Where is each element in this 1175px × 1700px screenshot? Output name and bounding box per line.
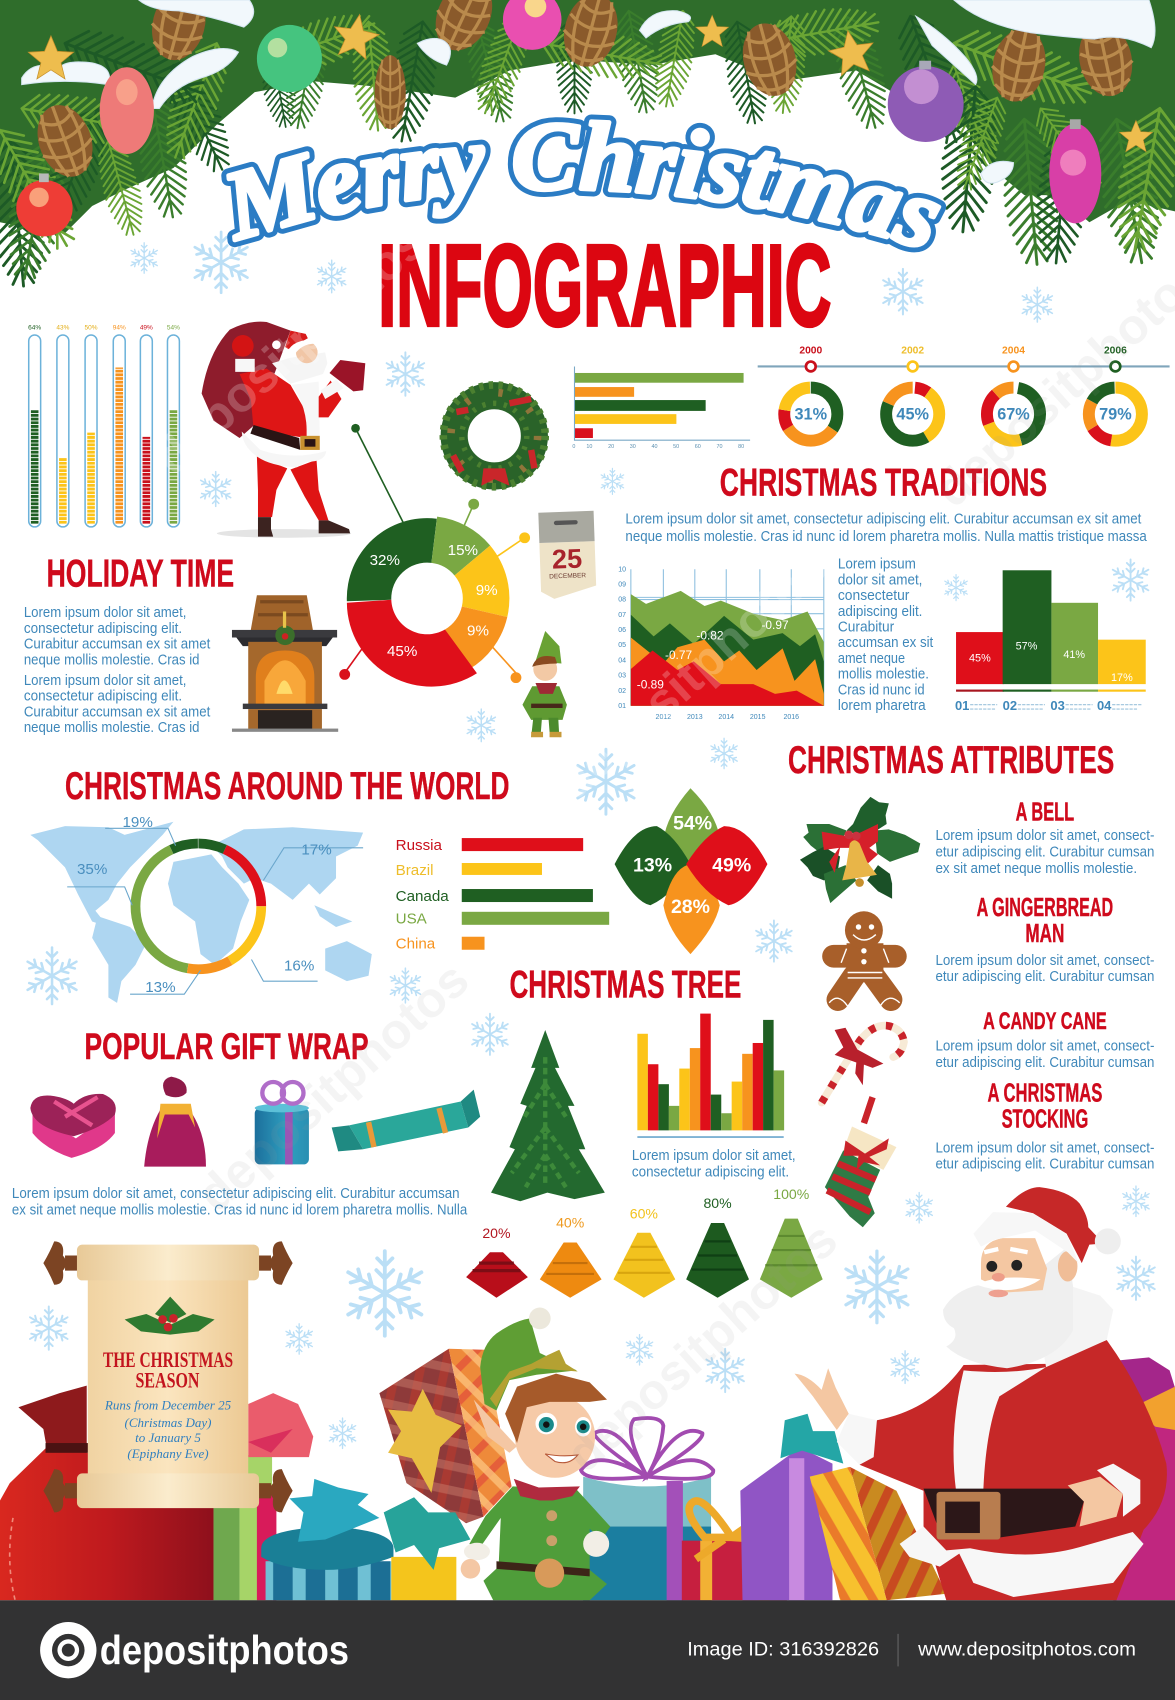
baubles	[16, 0, 1101, 236]
text: holiday time: Lorem ipsum dolor sit amet,	[24, 604, 186, 621]
green gift with pink bow	[214, 1393, 313, 1600]
snowflakes	[25, 232, 1157, 1448]
heading: Holiday Time: HOLIDAY TIME	[47, 553, 234, 596]
country bars: Canada	[396, 888, 449, 905]
text: stocking	[935, 1139, 1154, 1173]
horizontal bar chart: 60	[695, 444, 701, 450]
tube chart: 64%	[28, 325, 41, 332]
timeline 2002: 2002	[901, 345, 924, 356]
scroll heading: SEASON	[135, 1369, 200, 1393]
area chart: 10	[618, 566, 626, 573]
area chart: 2015	[750, 714, 766, 721]
cuff and hand left	[795, 1368, 877, 1465]
hat	[1006, 1187, 1121, 1263]
area chart: -0.89	[637, 677, 664, 691]
world map with ring chart: 35%	[77, 861, 107, 878]
timeline 2002: 45%	[896, 406, 929, 424]
watermarks: depositphotos	[143, 214, 436, 485]
bottom gifts scene	[0, 1349, 946, 1600]
horizontal bar chart	[572, 366, 750, 450]
holly	[125, 1297, 215, 1335]
illustration: gingerbread man	[829, 911, 900, 1006]
timeline 2002	[886, 345, 939, 441]
snow caps	[22, 0, 1155, 183]
tube chart	[28, 325, 180, 527]
world map with ring chart: 17%	[301, 841, 332, 858]
area chart: 07	[618, 612, 626, 619]
icon: candy wrap gift	[332, 1090, 480, 1151]
illustration: candy cane	[822, 1026, 904, 1103]
title: Merry Christmas: Merry Christmas	[221, 114, 946, 252]
timeline 2004: 67%	[997, 406, 1030, 424]
timeline 2000: 2000	[799, 345, 823, 356]
watermarks	[143, 214, 1175, 1483]
tube chart: 49%	[140, 325, 153, 332]
text: candy cane	[935, 1038, 1154, 1071]
area chart: 04	[618, 657, 626, 664]
timeline 2006	[1089, 345, 1142, 441]
icon: heart gift box	[30, 1094, 116, 1158]
heading: Christmas Tree: CHRISTMAS TREE	[509, 963, 741, 1006]
scroll text	[104, 1397, 232, 1461]
illustration: wreath	[443, 385, 545, 487]
illustration: calendar: DECEMBER	[549, 572, 586, 580]
striped gift	[810, 1467, 946, 1600]
column chart: 01-04	[955, 570, 1146, 713]
title: Merry Christmas: Merry Christmas	[226, 119, 942, 248]
donut chart: holiday time: 45%	[387, 643, 417, 660]
area chart: 2012	[656, 714, 671, 721]
area chart: 06	[618, 627, 626, 634]
horizontal bar chart: 20	[608, 444, 614, 450]
tube chart: 50%	[85, 325, 98, 332]
area chart: 08	[618, 597, 626, 604]
text: holiday time: neque mollis molestie. Cras id	[24, 719, 199, 736]
belt and buckle	[924, 1489, 1088, 1540]
donut chart: holiday time	[339, 424, 530, 687]
timeline donuts	[758, 345, 1170, 441]
watermarks: depositphotos	[555, 1211, 848, 1483]
petal chart: 49%	[712, 855, 751, 877]
illustration: Santa with sack	[202, 322, 365, 538]
illustration: small elf	[522, 631, 567, 737]
yellow gift with teal bow	[384, 1497, 470, 1600]
text: holiday time: consectetur adipiscing elit.	[24, 620, 182, 637]
column chart: 01-04: 57%	[1016, 640, 1038, 652]
collar fur	[1041, 1287, 1113, 1367]
area chart: 2014	[718, 714, 734, 721]
horizontal bar chart: 10	[586, 444, 592, 450]
text: area chart column: dolor sit amet,	[838, 571, 922, 588]
petal chart: 54%	[673, 812, 712, 834]
footer bar	[0, 1600, 1175, 1700]
text: bell: ex sit amet neque mollis molestie.	[935, 860, 1137, 877]
text: area chart column: Cras id nunc id	[838, 681, 925, 698]
fur front	[954, 1367, 1046, 1495]
scroll text: Runs from December 25	[104, 1397, 232, 1412]
tube chart: 43%	[56, 325, 70, 332]
world map with ring chart	[30, 814, 372, 1003]
horizontal bar chart: 80	[738, 444, 744, 450]
illustration: fireplace	[232, 595, 338, 732]
illustration: Christmas tree	[491, 1030, 605, 1201]
illustration: calendar: 25	[551, 543, 583, 575]
text: holiday time	[24, 604, 211, 736]
pyramid chart: 40%	[556, 1214, 585, 1230]
illustration: large elf	[461, 1308, 610, 1600]
tube chart: 94%	[113, 325, 126, 332]
timeline 2004	[987, 345, 1040, 441]
text: holiday time: Curabitur accumsan ex sit amet	[24, 704, 211, 721]
pyramid chart: 80%	[703, 1195, 732, 1211]
area chart: 2016	[783, 714, 799, 721]
text: holiday time: Lorem ipsum dolor sit amet,	[24, 672, 186, 689]
column chart: 01-04: 03	[1050, 698, 1065, 713]
country bars: Brazil	[396, 862, 434, 879]
petal chart: 28%	[671, 896, 710, 918]
right hand and cuff	[1068, 1464, 1140, 1527]
title: INFOGRAPHIC: INFOGRAPHIC	[378, 220, 831, 350]
heading: Popular Gift Wrap: POPULAR GIFT WRAP	[85, 1026, 369, 1067]
subheading: A Gingerbread Man	[977, 892, 1113, 948]
donut chart: holiday time: 32%	[370, 552, 400, 569]
petal chart	[615, 788, 767, 954]
beard	[943, 1247, 1073, 1368]
subheading: A Candy Cane: A CANDY CANE	[983, 1008, 1107, 1035]
icon: gift bag	[144, 1077, 206, 1167]
text: area chart column: lorem pharetra	[838, 697, 926, 714]
text: area chart column	[838, 556, 934, 714]
scroll text: (Christmas Day)	[125, 1415, 212, 1430]
pyramid chart: 20%	[482, 1225, 511, 1241]
image id: Image ID: 316392826	[687, 1639, 879, 1661]
subheading: A Christmas Stocking: A CHRISTMAS	[987, 1078, 1102, 1108]
brand name: depositphotos	[100, 1627, 349, 1673]
text: area chart column: accumsan ex sit	[838, 634, 934, 651]
coat	[860, 1340, 1167, 1600]
area chart: -0.77	[665, 648, 692, 662]
scroll heading: THE CHRISTMAS	[103, 1348, 233, 1372]
country bars: USA	[396, 911, 428, 928]
area chart: -0.97	[761, 618, 789, 632]
world map with ring chart: 13%	[145, 979, 176, 996]
icon: cylinder gift	[255, 1082, 309, 1164]
text: tree chart: Lorem ipsum dolor sit amet,	[632, 1147, 796, 1164]
leader lines and dots	[339, 424, 530, 683]
country bars	[396, 837, 609, 953]
watermarks: depositphotos	[187, 951, 479, 1222]
plaid gift	[379, 1349, 512, 1523]
text: area chart column: consectetur	[838, 587, 909, 604]
subheading: A Christmas Stocking: STOCKING	[1002, 1104, 1088, 1134]
timeline 2000: 31%	[795, 406, 828, 424]
watermarks: depositphotos	[544, 539, 837, 810]
text: holiday time: neque mollis molestie. Cras id	[24, 652, 199, 669]
area chart: 03	[618, 673, 626, 680]
column chart: 01-04: 04	[1097, 698, 1112, 713]
text: area chart column: Curabitur	[838, 619, 894, 636]
scroll text: (Epiphany Eve)	[127, 1446, 209, 1461]
scroll heading	[103, 1348, 233, 1393]
country bars: Russia	[396, 837, 443, 854]
illustration: holly and bell	[800, 797, 920, 903]
pyramid chart	[466, 1186, 823, 1298]
text: bell	[935, 827, 1154, 877]
purple gift	[740, 1414, 843, 1600]
horizontal bar chart: 40	[651, 444, 657, 450]
pyramid chart: 100%	[773, 1186, 810, 1202]
face	[973, 1212, 1079, 1297]
text: area chart column: adipiscing elit.	[838, 603, 922, 620]
column chart: 01-04: 01	[955, 698, 969, 713]
subheading: A Gingerbread Man: MAN	[1025, 918, 1064, 948]
text: area chart column: amet neque	[838, 650, 905, 667]
text: traditions intro	[625, 511, 1147, 545]
illustration: calendar	[538, 511, 597, 599]
donut chart: holiday time: 15%	[448, 542, 478, 559]
blue cylinder gift with purple bow	[581, 1418, 713, 1600]
column chart: 01-04: 02	[1003, 698, 1017, 713]
donut chart: holiday time: 9%	[467, 622, 489, 639]
horizontal bar chart: 30	[630, 444, 636, 450]
pine garland	[0, 0, 1175, 288]
area chart: 01	[618, 703, 626, 710]
timeline 2006: 2006	[1104, 345, 1127, 356]
area chart: 2013	[687, 714, 703, 721]
area chart: -0.82	[696, 629, 724, 643]
text: gift wrap	[12, 1185, 468, 1218]
website: www.depositphotos.com	[917, 1639, 1136, 1661]
red sack	[0, 1386, 214, 1600]
area chart: 02	[618, 688, 626, 695]
text: tree chart: consectetur adipiscing elit.	[632, 1163, 789, 1180]
world map with ring chart: 16%	[284, 957, 314, 974]
text: area chart column: Lorem ipsum	[838, 556, 916, 573]
world map with ring chart: 19%	[122, 814, 153, 831]
pine cones	[28, 0, 1139, 184]
text: gift wrap: ex sit amet neque mollis molestie. Cras id nunc id lorem pharetra mollis. Nulla	[12, 1201, 468, 1218]
tube chart: 54%	[167, 325, 180, 332]
pyramid chart: 60%	[630, 1206, 658, 1222]
petal chart: 13%	[633, 855, 672, 877]
illustration: large Santa	[795, 1187, 1175, 1600]
timeline 2000	[784, 345, 837, 441]
text: gingerbread	[935, 952, 1154, 985]
donut chart: holiday time: 9%	[476, 582, 498, 599]
column chart: 01-04: 41%	[1063, 649, 1085, 661]
grouped column chart	[637, 1014, 784, 1138]
country bars: China	[396, 936, 436, 953]
area chart	[618, 566, 824, 721]
gold stars	[28, 11, 1152, 152]
map continents	[30, 822, 372, 1003]
scroll handles	[43, 1241, 293, 1512]
horizontal bar chart: 50	[673, 444, 679, 450]
scroll: The Christmas Season	[43, 1241, 293, 1512]
blue round gift	[261, 1479, 393, 1600]
column chart: 01-04: 45%	[969, 652, 991, 664]
red gift with gold ribbon	[682, 1501, 787, 1600]
text: area chart column: mollis molestie.	[838, 666, 929, 683]
bottom fur	[900, 1527, 1144, 1597]
scroll text: to January 5	[135, 1430, 201, 1445]
horizontal bar chart: 0	[572, 444, 575, 450]
area chart: 09	[618, 582, 626, 589]
illustration: stocking	[825, 1097, 896, 1227]
text: holiday time: consectetur adipiscing elit.	[24, 687, 182, 704]
column chart: 01-04: 17%	[1111, 672, 1133, 684]
text: tree chart	[632, 1147, 796, 1180]
subheading: A Christmas Stocking	[987, 1078, 1102, 1134]
icon: camera logo	[40, 1622, 96, 1678]
timeline 2006: 79%	[1099, 406, 1132, 424]
pink bag	[1113, 1357, 1175, 1600]
subheading: A Bell: A BELL	[1016, 797, 1074, 827]
text: gift wrap: Lorem ipsum dolor sit amet, consectetur adipiscing elit. Curabitur accumsan	[12, 1185, 460, 1202]
area chart: 05	[618, 642, 626, 649]
horizontal bar chart: 70	[716, 444, 723, 450]
timeline 2004: 2004	[1002, 345, 1025, 356]
text: holiday time: Curabitur accumsan ex sit amet	[24, 635, 211, 652]
heading: Christmas Around The World: CHRISTMAS AROUND THE WORLD	[65, 765, 509, 808]
